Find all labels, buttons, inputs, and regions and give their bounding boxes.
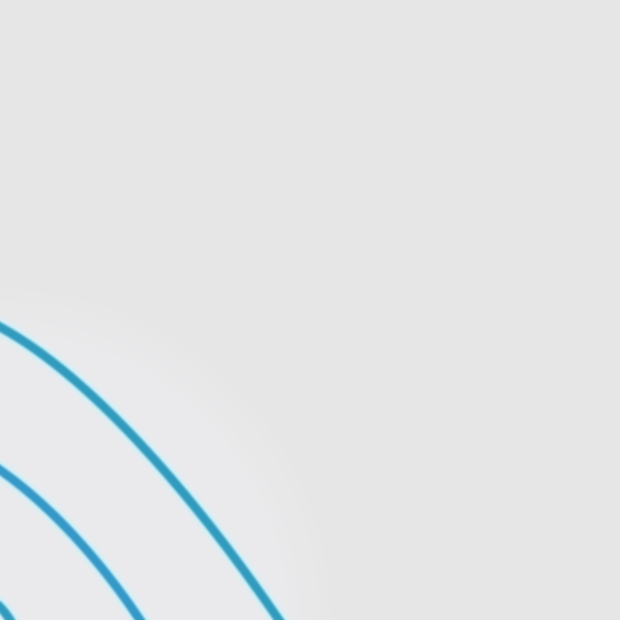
arc: inner xyxy=(0,607,10,620)
pale compression haze behind arcs xyxy=(0,280,340,620)
arc: outer xyxy=(0,327,279,620)
arc: middle xyxy=(0,470,140,620)
